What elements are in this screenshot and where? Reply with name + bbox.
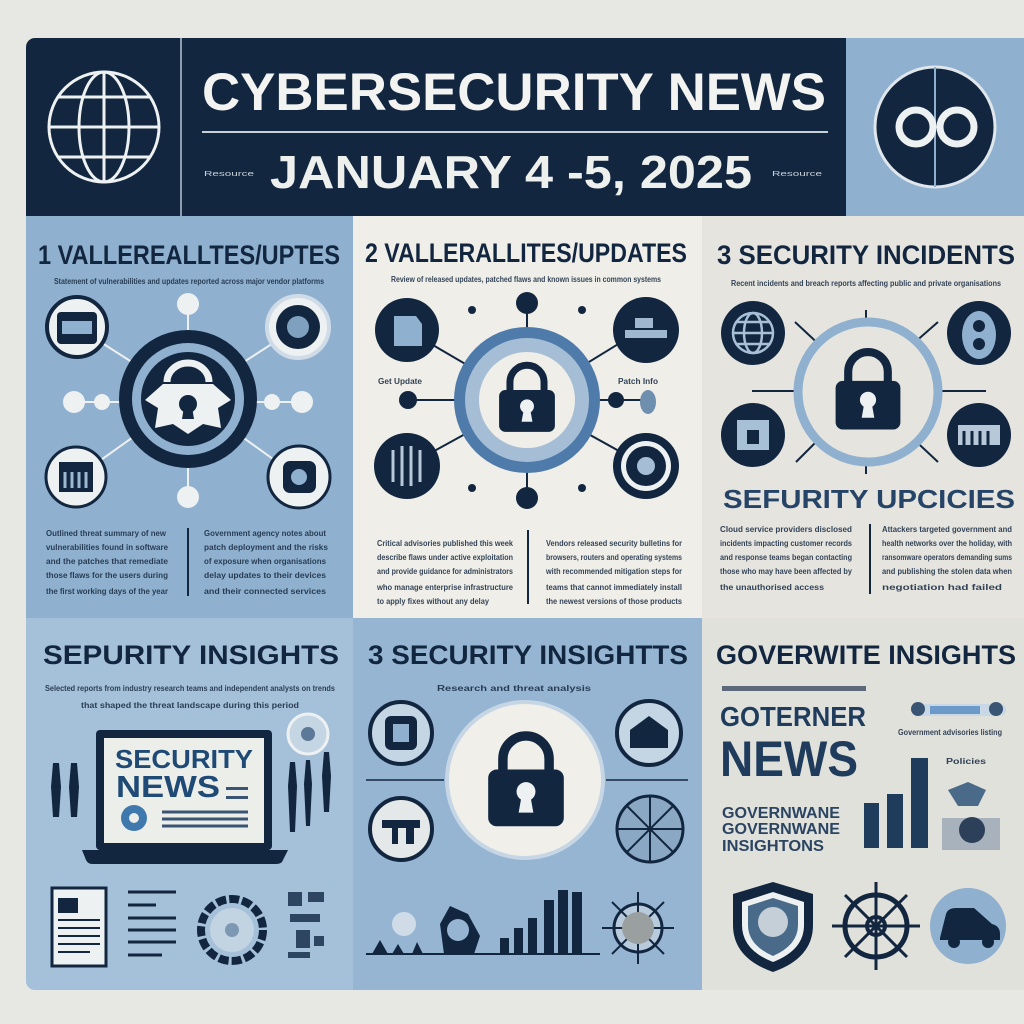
icon: tools left xyxy=(51,763,79,817)
icon: list xyxy=(128,892,176,955)
body text columns: incidents impacting customer records xyxy=(720,539,852,548)
panel: vulnerabilities 1 xyxy=(26,216,353,618)
body text columns: Cloud service providers disclosed xyxy=(720,525,852,534)
icon: globe xyxy=(49,72,159,182)
panel: vulnerabilities 2: Review of released updates, patched flaws and known issues in common systems xyxy=(391,275,661,284)
panel: security insights left xyxy=(26,618,353,990)
panel: security insights centre: Research and threat analysis xyxy=(437,684,592,693)
heading: 2 VALLERALLITES/UPDATES xyxy=(365,238,687,268)
panel: vulnerabilities 2 xyxy=(366,242,686,606)
central lock node xyxy=(454,327,600,473)
body text columns: the newest versions of those products xyxy=(546,597,683,606)
body text columns: Government agency notes about xyxy=(204,529,326,538)
body text columns: those flaws for the users during xyxy=(46,571,168,580)
body text columns: with recommended mitigation steps for xyxy=(545,567,682,576)
body text columns: patch deployment and the risks xyxy=(204,543,329,552)
panel: vulnerabilities 1: Statement of vulnerabilities and updates reported across major vendor platforms xyxy=(54,277,324,286)
subheading: INSIGHTONS xyxy=(722,838,824,855)
body text columns: the unauthorised access xyxy=(720,583,825,592)
central lock node xyxy=(798,322,938,462)
body text columns: Critical advisories published this week xyxy=(377,539,513,548)
bottom chart xyxy=(366,890,600,954)
body text columns: describe flaws under active exploitation xyxy=(377,553,513,562)
connector lines xyxy=(416,314,640,488)
body text columns: the first working days of the year xyxy=(46,587,168,596)
large heading: government news: GOTERNER xyxy=(720,701,866,732)
connector lines xyxy=(84,314,292,486)
subheading xyxy=(722,805,840,855)
icon: vehicle badge xyxy=(930,888,1006,964)
panel: government insights: NEWS xyxy=(720,731,858,787)
heading: GOVERWITE INSIGHTS xyxy=(716,640,1016,670)
body text columns: and response teams began contacting xyxy=(720,553,852,562)
satellite nodes xyxy=(374,292,679,509)
panel: security incidents xyxy=(718,245,1014,594)
panel: security insights left: Selected reports from industry research teams and independent analysts on trends xyxy=(45,684,335,693)
central lock node xyxy=(119,330,257,468)
header banner: Resource xyxy=(772,171,822,178)
body text columns: of exposure when organisations xyxy=(204,557,327,566)
icon: gear circle xyxy=(201,899,263,961)
header banner xyxy=(26,38,1024,216)
body text columns: and publishing the stolen data when xyxy=(882,567,1012,576)
satellite nodes xyxy=(721,301,1011,467)
icon: laptop security news xyxy=(82,730,288,864)
subheading: GOVERNWANE xyxy=(722,805,840,822)
top right slider xyxy=(898,702,1006,766)
icon: pattern xyxy=(288,892,324,958)
icon: network sphere xyxy=(602,892,674,964)
panel: security incidents: Recent incidents and breach reports affecting public and private organisations xyxy=(731,279,1001,288)
body text columns xyxy=(376,539,683,606)
body text columns: Outlined threat summary of new xyxy=(46,529,167,538)
node captions: Get Update xyxy=(378,377,423,386)
header small captions: Resource xyxy=(204,171,254,178)
heading: 3 SECURITY INCIDENTS xyxy=(717,240,1015,270)
panel: security insights left: that shaped the threat landscape during this period xyxy=(81,701,299,710)
satellite nodes xyxy=(46,293,330,508)
icon: tools right xyxy=(288,714,331,832)
body text columns: Attackers targeted government and xyxy=(882,525,1012,534)
date: JANUARY 4 -5, 2025 xyxy=(270,146,752,198)
heading: 1 VALLEREALLTES/UPTES xyxy=(38,240,340,270)
icon: ship wheel xyxy=(832,882,920,970)
top right slider: Government advisories listing xyxy=(898,728,1002,737)
satellite nodes xyxy=(370,701,683,862)
body text columns: and provide guidance for administrators xyxy=(377,567,513,576)
body text columns: delay updates to their devices xyxy=(204,571,327,580)
body text columns: Vendors released security bulletins for xyxy=(546,539,682,548)
body text columns: and their connected services xyxy=(204,587,327,596)
subheading: GOVERNWANE xyxy=(722,821,840,838)
icon: masked face xyxy=(875,67,995,187)
body text columns xyxy=(720,525,1012,592)
body text columns xyxy=(46,529,329,596)
body text columns: vulnerabilities found in software xyxy=(46,543,169,552)
body text columns: those who may have been affected by xyxy=(720,567,852,576)
icon: document xyxy=(52,888,106,966)
title: CYBERSECURITY NEWS xyxy=(202,63,826,122)
heading: 3 SECURITY INSIGHTTS xyxy=(368,640,688,670)
subheading: SEFURITY UPCICIES xyxy=(723,484,1015,514)
body text columns: negotiation had failed xyxy=(882,583,1002,592)
body text columns: teams that cannot immediately install xyxy=(546,583,682,592)
bar chart xyxy=(864,758,928,848)
heading: SEPURITY INSIGHTS xyxy=(43,640,339,670)
panel: vulnerabilities 2: Patch Info xyxy=(618,377,658,386)
top right slider: Policies xyxy=(946,757,987,766)
icon: laptop security news: NEWS xyxy=(116,769,220,804)
body text columns: who manage enterprise infrastructure xyxy=(376,583,514,592)
body text columns: browsers, routers and operating systems xyxy=(546,553,682,562)
body text columns: and the patches that remediate xyxy=(46,557,169,566)
panel: security insights centre xyxy=(353,618,702,990)
body text columns: health networks over the holiday, with xyxy=(882,539,1012,548)
body text columns: to apply fixes without any delay xyxy=(377,597,490,606)
central lock xyxy=(447,702,603,858)
panel: government insights xyxy=(702,618,1024,990)
connector lines xyxy=(752,310,986,474)
icon: officer figure xyxy=(942,782,1000,850)
icon: shield xyxy=(733,882,813,972)
icon: laptop security news: SECURITY xyxy=(115,744,253,774)
